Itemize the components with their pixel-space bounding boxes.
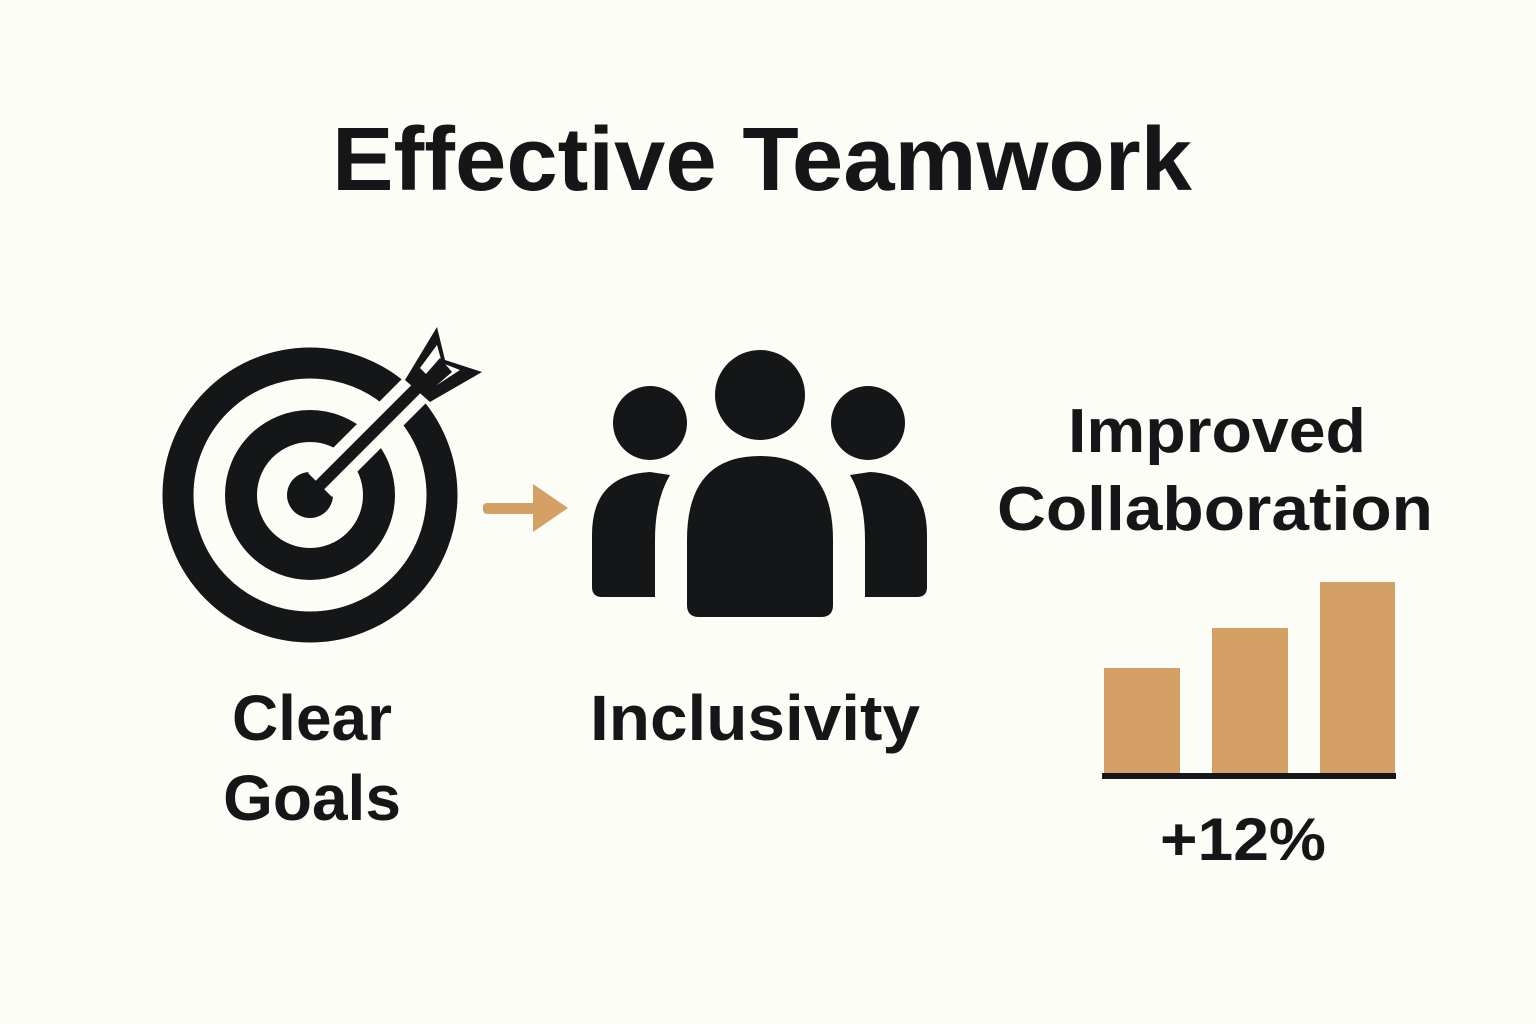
label: Inclusivity: Inclusivity <box>590 682 920 754</box>
label: Improved Collaboration: Improved <box>1068 397 1366 466</box>
label: Improved Collaboration <box>997 397 1433 544</box>
stat: +12%: +12% <box>1160 806 1326 873</box>
icon: people group <box>592 350 927 617</box>
bar chart <box>1102 582 1396 779</box>
label: Clear Goals <box>223 682 401 834</box>
icon: target with arrow <box>178 327 482 627</box>
arrow: goals to inclusivity <box>483 484 568 532</box>
label: Clear Goals: Goals <box>223 762 401 834</box>
label: Clear Goals: Clear <box>232 682 392 754</box>
label: Improved Collaboration: Collaboration <box>997 475 1433 544</box>
title: Effective Teamwork <box>332 110 1193 210</box>
